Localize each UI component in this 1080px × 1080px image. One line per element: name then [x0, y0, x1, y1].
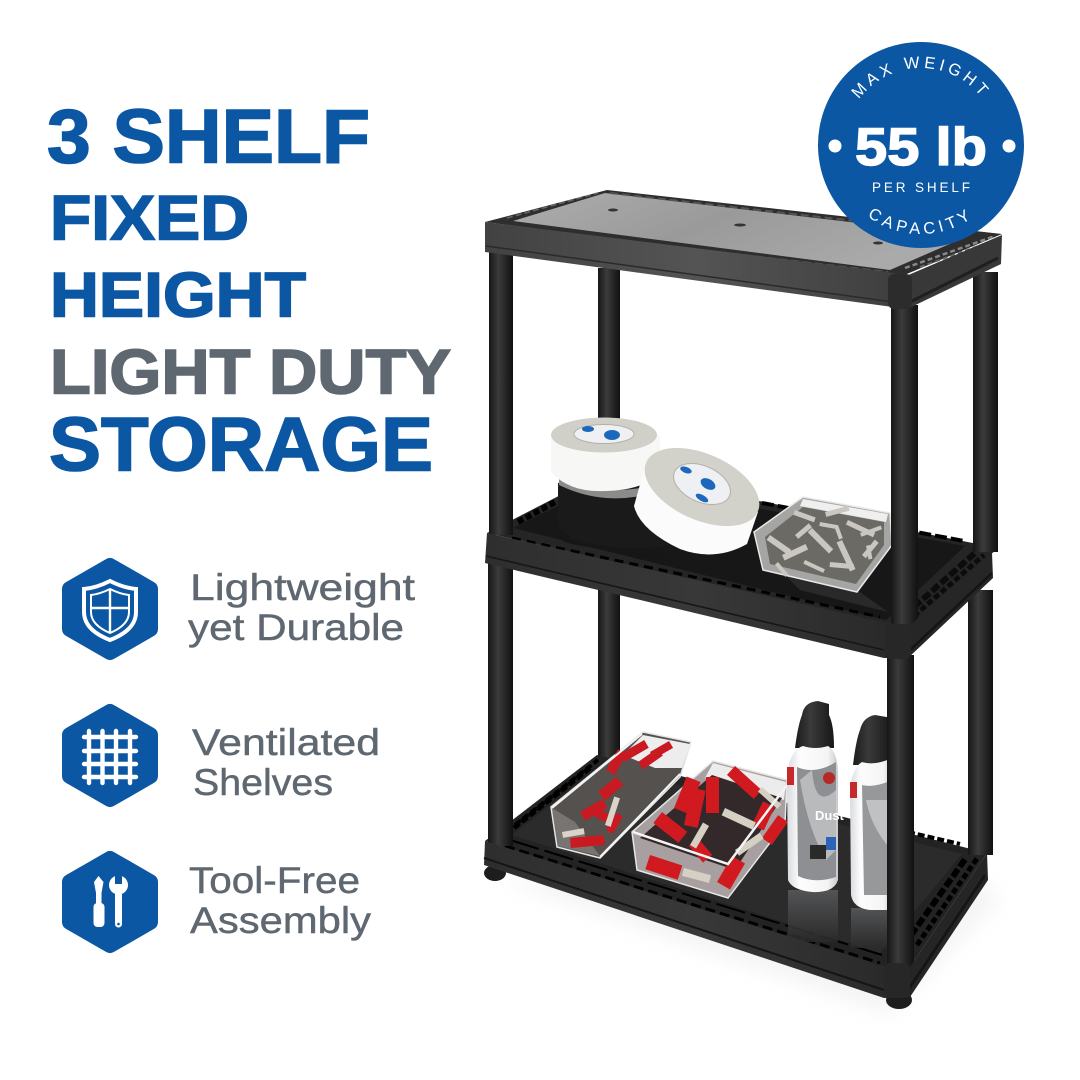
- shelf unit product image: [484, 190, 1002, 1015]
- title: [47, 94, 451, 488]
- label: Ventilated: [192, 722, 380, 763]
- label line 2: Shelves: [193, 762, 333, 803]
- white tape roll front: [633, 432, 771, 554]
- label: Lightweight: [190, 567, 416, 608]
- tray of silver clips: [754, 497, 892, 592]
- heading: height: HEIGHT: [50, 260, 306, 330]
- bottom shelf fascia: [484, 841, 988, 1009]
- tray of red clips right: [632, 761, 788, 898]
- back left post: [598, 268, 620, 758]
- badge circle: [818, 42, 1024, 248]
- bullet right: [1002, 140, 1016, 152]
- front right post lower: [887, 655, 914, 967]
- value: 55 lb: [855, 118, 987, 177]
- label: Tool-Free: [189, 860, 360, 901]
- per shelf: PER SHELF: [872, 180, 970, 195]
- floor shadow: [500, 860, 1000, 1015]
- white tape roll back: [551, 418, 660, 491]
- icon: grid: [70, 712, 150, 799]
- middle shelf surface: [487, 471, 998, 628]
- feature: tool-free assembly: [70, 859, 372, 945]
- tape rolls: [551, 418, 771, 563]
- bullet left: [828, 140, 842, 152]
- badge: max weight: [818, 42, 1024, 248]
- heading: fixed: FIXED: [50, 184, 249, 254]
- reflections: [788, 890, 838, 942]
- front left post upper: [489, 250, 513, 535]
- aerosol can front: [787, 701, 845, 892]
- top shelf surface: [485, 190, 1002, 276]
- heading: 3 shelf: 3 SHELF: [47, 94, 370, 180]
- back right post: [973, 272, 998, 552]
- heading: storage: STORAGE: [49, 402, 433, 488]
- label line 2: yet Durable: [188, 607, 404, 648]
- arc text: max weight: MAX WEIGHT: [851, 56, 990, 98]
- top shelf fascia: [485, 222, 1002, 310]
- icon: tools: [70, 859, 150, 945]
- can label: Dust: [815, 808, 845, 823]
- front left post lower: [488, 562, 513, 846]
- aerosol can back: [850, 715, 892, 910]
- middle shelf fascia: [485, 533, 993, 659]
- heading: light duty: LIGHT DUTY: [50, 338, 451, 408]
- front right post upper: [891, 305, 918, 627]
- icon: shield: [70, 566, 150, 652]
- bottom shelf surface: [485, 755, 987, 968]
- feature: lightweight yet durable: [70, 566, 416, 652]
- tray of red clips left: [551, 732, 691, 858]
- arc text: capacity: CAPACITY: [870, 209, 968, 234]
- black tape roll: [557, 478, 672, 563]
- label line 2: Assembly: [190, 900, 372, 941]
- back right post lower: [968, 590, 993, 855]
- feature: ventilated shelves: [70, 712, 380, 803]
